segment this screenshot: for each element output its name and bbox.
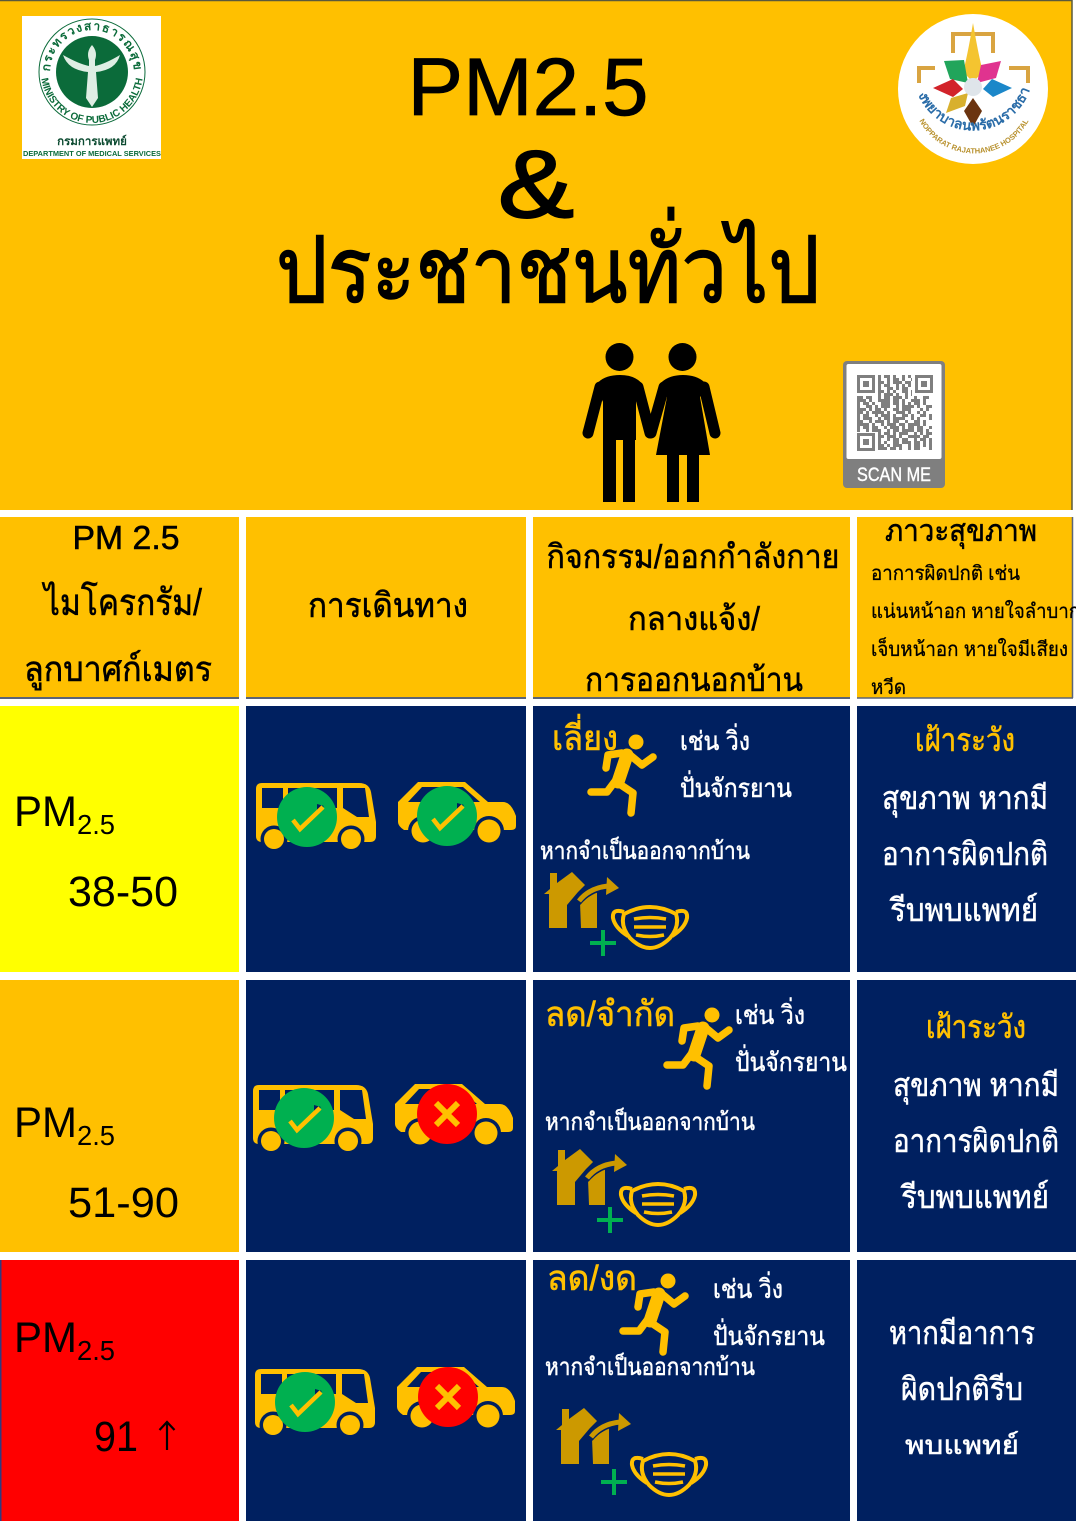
table header: travel: การเดินทาง [308,587,468,625]
row 2: activity: ลด/จำกัด [545,995,675,1034]
row 1: PM2.5 38-50 level: 2.5 [77,809,115,840]
logo: Department of Medical Services: MINISTRY OF PUBLIC HEALTH [41,78,142,123]
icon: car not allowed [397,1367,515,1431]
row 1: PM2.5 38-50 level: 38-50 [68,868,178,916]
table header: health condition: อาการผิดปกติ เช่น [871,563,1020,585]
logo: Department of Medical Services [22,16,161,159]
logo: Department of Medical Services: DEPARTMENT OF MEDICAL SERVICES [23,149,161,158]
logo: Nopparat Rajathanee Hospital: NOPPARAT RAJATHANEE HOSPITAL [920,118,1028,154]
row 1: activity [533,706,850,972]
row 1: activity: หากจำเป็นออกจากบ้าน [540,836,750,865]
row 1: activity: เลี่ยง [552,714,618,758]
row 2: health advice: รีบพบแพทย์ [900,1179,1049,1215]
row 1: PM2.5 38-50 level: PM [14,788,77,836]
row 3: health advice: พบแพทย์ [905,1430,1019,1460]
table header: health condition: หวีด [871,677,906,699]
row 2: health advice: เฝ้าระวัง [926,1009,1026,1045]
table header: PM 2.5 unit: ไมโครกรัม/ [41,581,203,623]
row 3: activity: ลด/งด [547,1259,637,1298]
row 3: activity [533,1259,850,1521]
row 3: health advice [857,1260,1076,1521]
row 1: activity: เช่น วิ่ง [680,723,750,756]
table header: outdoor activity: การออกนอกบ้าน [585,661,803,698]
row 2: travel icons [246,980,526,1252]
QR code: scan me: SCAN ME [857,465,931,486]
logo: Department of Medical Services: กระทรวงสาธารณสุข [43,22,141,71]
title: & [498,131,574,238]
table header: health condition [857,515,1076,699]
row 3: PM2.5 91 and above level: PM [14,1314,77,1362]
row 1: health advice: อาการผิดปกติ [882,836,1048,872]
table header: outdoor activity: กลางแจ้ง/ [628,600,761,637]
row 3: PM2.5 91 and above level: 2.5 [77,1335,115,1366]
logo: Nopparat Rajathanee Hospital [898,14,1048,164]
row 2: health advice [857,980,1076,1252]
table header: travel [246,517,526,699]
row 2: PM2.5 51-90 level: 2.5 [77,1120,115,1151]
row 3: health advice: หากมีอาการ [889,1315,1035,1351]
icon: couple holding hands [588,343,715,502]
row 3: travel icons [246,1260,526,1521]
row 2: activity: หากจำเป็นออกจากบ้าน [545,1107,755,1136]
title: PM2.5 [408,42,648,133]
title [276,42,820,322]
row 2: activity [533,980,850,1252]
row 1: travel icons [246,706,526,972]
row 3: PM2.5 91 and above level: 91 [94,1413,138,1461]
row 3: activity: เช่น วิ่ง [713,1271,783,1304]
row 2: activity: เช่น วิ่ง [735,997,805,1030]
row 1: activity: ปั่นจักรยาน [680,770,792,803]
row 3: PM2.5 91 and above level [0,1260,239,1521]
table header: health condition: เจ็บหน้าอก หายใจมีเสียง [871,636,1068,661]
row 1: health advice [857,706,1076,972]
row 1: PM2.5 38-50 level [0,706,239,972]
table header: health condition: ภาวะสุขภาพ [885,515,1037,550]
table header: PM 2.5 unit [0,517,239,699]
row 2: PM2.5 51-90 level: 51-90 [68,1179,179,1227]
icon: car allowed [398,782,516,846]
row 3: health advice: ผิดปกติรีบ [901,1371,1023,1407]
row 2: PM2.5 51-90 level [0,980,239,1252]
logo: Department of Medical Services: กรมการแพทย์ [57,134,127,148]
table header: outdoor activity [533,517,850,699]
table header: outdoor activity: กิจกรรม/ออกกำลังกาย [546,538,840,575]
table header: PM 2.5 unit: ลูกบาศก์เมตร [24,650,212,690]
title: ประชาชนทั่วไป [276,207,820,322]
row 3: activity: หากจำเป็นออกจากบ้าน [545,1352,755,1381]
icon: bus allowed [255,1369,375,1438]
row 1: health advice: เฝ้าระวัง [915,722,1015,758]
row 1: health advice: รีบพบแพทย์ [889,892,1038,928]
icon: car not allowed [395,1084,513,1148]
row 2: activity: ปั่นจักรยาน [735,1044,847,1077]
icon: bus allowed [256,783,376,852]
row 2: PM2.5 51-90 level: PM [14,1099,77,1147]
icon: bus allowed [253,1085,373,1154]
row 3: activity: ปั่นจักรยาน [713,1318,825,1351]
table header: PM 2.5 unit: PM 2.5 [72,519,180,556]
header panel [0,0,1073,510]
row 1: health advice: สุขภาพ หากมี [882,780,1048,818]
QR code: scan me [843,361,945,488]
